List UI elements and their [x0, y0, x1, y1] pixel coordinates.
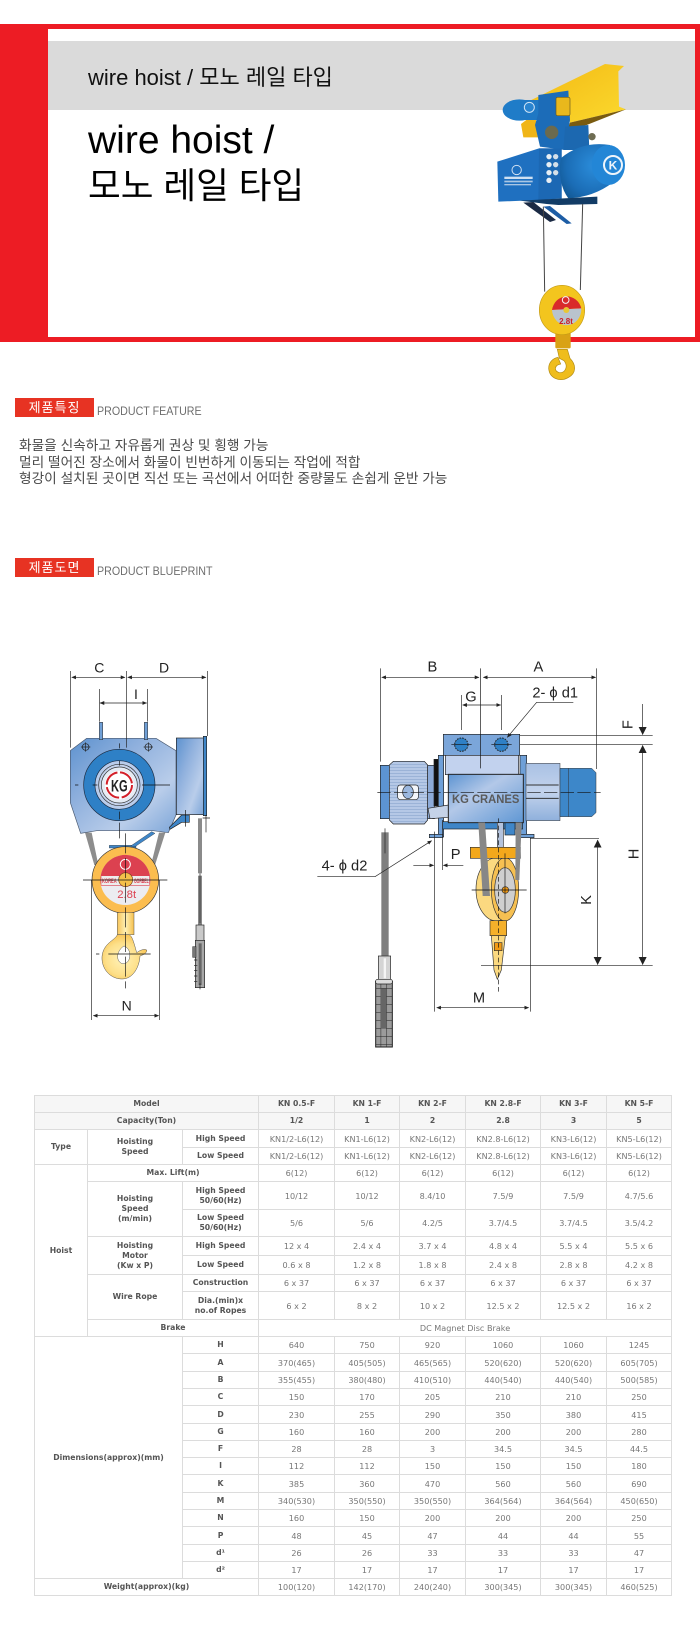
specification table: 520(620) — [555, 1358, 592, 1368]
specification table: 1/2 — [290, 1116, 303, 1125]
specification table: (m/min) — [118, 1214, 152, 1223]
centre lines — [377, 668, 601, 993]
specification table: 150 — [425, 1461, 440, 1471]
specification table: 465(565) — [414, 1358, 451, 1368]
specification table: Brake — [161, 1323, 185, 1332]
specification table: High Speed — [196, 1134, 245, 1142]
specification table: 47 — [427, 1530, 438, 1540]
specification table: 5.5 x 6 — [625, 1241, 653, 1251]
specification table: 350(550) — [414, 1496, 451, 1506]
specification table: 370(465) — [278, 1358, 315, 1368]
specification table: 4.2/5 — [422, 1218, 443, 1228]
specification table: D — [217, 1410, 224, 1418]
I-beam — [521, 64, 626, 137]
specification table: 6 x 37 — [626, 1278, 652, 1288]
specification table: KN3-L6(12) — [551, 1151, 596, 1161]
specification table: 690 — [631, 1478, 647, 1488]
specification table: 180 — [631, 1461, 647, 1471]
specification table: 460(525) — [620, 1582, 658, 1592]
specification table: 470 — [425, 1478, 440, 1488]
specification table: KN 1-F — [353, 1099, 381, 1108]
specification table: G — [217, 1427, 224, 1436]
specification table: 230 — [289, 1410, 304, 1420]
main title: wire hoist / — [88, 119, 274, 162]
specification table: 48 — [291, 1530, 302, 1540]
specification table: KN3-L6(12) — [551, 1134, 596, 1144]
specification table: 205 — [425, 1392, 440, 1402]
small heading: wire hoist / 모노 레일 타입 — [88, 65, 333, 90]
specification table: 170 — [359, 1392, 375, 1402]
dimension labels: N — [122, 997, 132, 1013]
dimension labels: D — [159, 659, 169, 675]
specification table: 1.8 x 8 — [419, 1260, 446, 1270]
specification table: 50/60(Hz) — [199, 1223, 242, 1232]
dimension labels: B — [427, 660, 437, 676]
hook — [549, 349, 575, 380]
specification table: 3.7 x 4 — [419, 1241, 446, 1251]
specification table: 200 — [566, 1427, 581, 1437]
specification table: 290 — [425, 1410, 440, 1420]
dimension labels: F — [620, 720, 636, 729]
specification table: 150 — [566, 1461, 581, 1471]
specification table: 33 — [498, 1548, 508, 1558]
dimensions C D I N — [70, 671, 207, 1020]
specification table: P — [218, 1530, 223, 1540]
dimension labels: C — [94, 659, 104, 675]
top girder clamp — [443, 734, 520, 775]
specification table: 34.5 — [494, 1444, 512, 1454]
KG Cranes main case: KG CRANES — [452, 793, 520, 806]
specification table: KN 2-F — [418, 1099, 447, 1108]
specification table: 112 — [359, 1461, 375, 1471]
load block: 2.8t — [117, 889, 137, 901]
specification table: 5.5 x 4 — [560, 1241, 588, 1251]
centre lines — [75, 743, 210, 989]
specification table: Max. Lift(m) — [147, 1168, 200, 1177]
specification table: 2 — [430, 1116, 435, 1125]
specification table: 350 — [495, 1410, 511, 1420]
banner: grey title strip — [48, 41, 695, 110]
specification table: 3 — [430, 1444, 435, 1454]
specification table: KN 2.8-F — [484, 1099, 522, 1108]
specification table: F — [218, 1444, 223, 1453]
specification table: N — [217, 1513, 224, 1522]
specification table: 440(540) — [484, 1375, 522, 1385]
specification table: KN1-L6(12) — [344, 1151, 390, 1161]
dimension labels: A — [533, 660, 543, 676]
banner: white panel — [48, 29, 695, 337]
dimension labels: K — [579, 895, 595, 905]
specification table: 350(550) — [348, 1496, 386, 1506]
specification table — [34, 1095, 672, 1596]
blueprint: front view — [70, 659, 210, 1020]
specification table: Capacity(Ton) — [117, 1116, 176, 1125]
specification table: 12.5 x 2 — [486, 1300, 520, 1310]
section subtitle: product feature: PRODUCT FEATURE — [97, 404, 202, 418]
specification table: Wire Rope — [113, 1292, 157, 1301]
specification table: M — [217, 1496, 224, 1505]
specification table: 6 x 37 — [490, 1278, 516, 1288]
specification table: KN 3-F — [559, 1099, 588, 1108]
specification table: Low Speed — [197, 1213, 244, 1222]
feature text: 화물을 신속하고 자유롭게 권상 및 횡행 가능 — [19, 438, 268, 453]
specification table: 160 — [289, 1513, 304, 1523]
specification table: 240(240) — [414, 1582, 451, 1592]
control box — [497, 148, 562, 202]
wire ropes — [478, 823, 522, 896]
specification table: 385 — [289, 1478, 304, 1488]
specification table: KN5-L6(12) — [616, 1134, 662, 1144]
specification table: 10/12 — [355, 1190, 379, 1200]
specification table: 10 x 2 — [420, 1300, 445, 1310]
specification table: Hoisting — [117, 1240, 153, 1250]
housing — [70, 738, 176, 833]
specification table: 6 x 2 — [286, 1300, 307, 1310]
specification table: 17 — [291, 1565, 302, 1575]
feature text — [19, 438, 447, 486]
specification table: 415 — [631, 1410, 647, 1420]
specification table: 2.4 x 8 — [489, 1260, 517, 1270]
bolt holes — [81, 742, 153, 752]
specification table: 50/60(Hz) — [199, 1196, 242, 1204]
specification table: KN2.8-L6(12) — [476, 1151, 530, 1161]
specification table: I — [219, 1461, 222, 1470]
specification table: 33 — [427, 1548, 438, 1558]
specification table: 560 — [495, 1478, 511, 1488]
specification table: 34.5 — [564, 1444, 583, 1454]
specification table: 440(540) — [555, 1375, 592, 1385]
specification table: Dia.(min)x — [198, 1296, 243, 1304]
specification table: 605(705) — [620, 1358, 658, 1368]
specification table: 250 — [631, 1513, 647, 1523]
specification table: 33 — [568, 1548, 579, 1558]
drum with KG logo — [84, 749, 155, 821]
specification table: 1060 — [563, 1340, 584, 1350]
specification table: KN1-L6(12) — [344, 1134, 390, 1144]
section tag: product blueprint: 제품도면 — [29, 560, 80, 575]
specification table: 7.5/9 — [493, 1190, 513, 1200]
specification table: 28 — [362, 1444, 372, 1454]
specification table: 200 — [566, 1513, 581, 1523]
specification table: 45 — [362, 1530, 372, 1540]
specification table: A — [218, 1358, 223, 1366]
specification table: 12.5 x 2 — [557, 1300, 590, 1310]
specification table: 6(12) — [563, 1168, 584, 1178]
specification table: 500(585) — [620, 1375, 658, 1385]
specification table: Hoisting — [117, 1194, 153, 1203]
specification table: 160 — [359, 1427, 375, 1437]
specification table: 6 x 37 — [420, 1278, 445, 1288]
specification table: KN2.8-L6(12) — [476, 1134, 530, 1144]
bottom block — [470, 823, 520, 979]
hoist drum motor: K — [609, 158, 618, 172]
banner: red frame — [0, 24, 700, 342]
specification table: 142(170) — [348, 1582, 386, 1592]
specification table: 200 — [495, 1513, 511, 1523]
specification table: Low Speed — [197, 1151, 244, 1160]
specification table: 5/6 — [360, 1218, 374, 1228]
specification table: 3 — [571, 1116, 576, 1125]
specification table: Speed — [122, 1204, 148, 1213]
specification table: 200 — [425, 1513, 440, 1523]
specification table: H — [217, 1340, 224, 1349]
suspension ropes — [85, 833, 165, 865]
specification table: 255 — [359, 1410, 375, 1420]
specification table: DC Magnet Disc Brake — [420, 1323, 510, 1333]
right motor — [526, 763, 596, 821]
specification table: Dimensions(approx)(mm) — [53, 1452, 164, 1462]
specification table: KN 5-F — [625, 1099, 653, 1108]
photo: blue wire hoist — [497, 64, 626, 380]
specification table: KN1/2-L6(12) — [270, 1134, 323, 1144]
specification table: 6 x 37 — [354, 1278, 380, 1288]
specification table: 560 — [566, 1478, 581, 1488]
hook — [102, 913, 147, 979]
left drive motor — [380, 759, 439, 824]
specification table: 380 — [566, 1410, 581, 1420]
dimension labels: 4- ϕ d2 — [322, 859, 367, 875]
specification table: 26 — [362, 1548, 372, 1558]
specification table: 100(120) — [278, 1582, 315, 1592]
hook block: 2.8t — [559, 317, 573, 326]
wire guide bracket — [109, 832, 155, 848]
specification table: 280 — [631, 1427, 647, 1437]
specification table: 364(564) — [484, 1496, 522, 1506]
KG Cranes main case — [448, 774, 523, 823]
specification table: B — [218, 1375, 223, 1384]
hoist drum motor — [520, 144, 625, 224]
specification table: 5/6 — [290, 1218, 303, 1228]
section tag: product blueprint — [15, 558, 94, 577]
specification table: 1.2 x 8 — [353, 1260, 381, 1270]
specification table: 360 — [359, 1478, 375, 1488]
specification table: 17 — [568, 1565, 579, 1575]
specification table: Hoisting — [117, 1137, 153, 1146]
specification table: 16 x 2 — [626, 1300, 652, 1310]
specification table: 6(12) — [356, 1168, 378, 1178]
specification table: 380(480) — [348, 1375, 386, 1385]
side control box — [169, 736, 207, 829]
main title — [88, 119, 304, 206]
load block: KOREA — [102, 878, 117, 885]
specification table: 3.7/4.5 — [489, 1218, 517, 1228]
specification table: 6(12) — [422, 1168, 443, 1178]
specification table: 2.4 x 4 — [353, 1241, 381, 1251]
load block — [92, 847, 159, 913]
specification table: 210 — [566, 1392, 581, 1402]
dimension labels: G — [465, 690, 477, 706]
specification table: 28 — [291, 1444, 302, 1454]
specification table: 8 x 2 — [357, 1300, 377, 1310]
specification table: Motor — [122, 1250, 148, 1260]
specification table: 7.5/9 — [563, 1190, 584, 1200]
specification table: Construction — [193, 1278, 248, 1287]
specification table: 4.2 x 8 — [625, 1260, 653, 1270]
specification table: (Kw x P) — [117, 1260, 153, 1270]
specification table: 210 — [495, 1392, 511, 1402]
specification table: Model — [133, 1099, 160, 1108]
specification table: 2.8 — [496, 1116, 510, 1125]
mounting lugs — [99, 722, 148, 740]
specification table: 6(12) — [286, 1168, 307, 1178]
specification table: KN2-L6(12) — [410, 1134, 455, 1144]
specification table: 4.8 x 4 — [489, 1241, 517, 1251]
specification table: 750 — [359, 1340, 375, 1350]
specification table: 4.7/5.6 — [625, 1190, 653, 1200]
specification table: 0.6 x 8 — [283, 1260, 310, 1270]
specification table: KN2-L6(12) — [410, 1151, 455, 1161]
pendant cable — [376, 828, 392, 1047]
specification table: 3.7/4.5 — [559, 1218, 588, 1228]
specification table: 8.4/10 — [420, 1190, 445, 1200]
blueprint: side view — [317, 660, 653, 1048]
specification table: 55 — [634, 1530, 644, 1540]
specification table: no.of Ropes — [195, 1306, 246, 1314]
drum with KG logo: KG — [111, 776, 128, 795]
dimension labels — [94, 659, 169, 1013]
specification table: 1 — [364, 1116, 370, 1125]
specification table: 300(345) — [555, 1582, 592, 1592]
specification table: Low Speed — [197, 1260, 244, 1269]
specification table: Hoist — [50, 1246, 72, 1254]
specification table: 450(650) — [620, 1496, 658, 1506]
specification table: 300(345) — [484, 1582, 522, 1592]
specification table: 12 x 4 — [284, 1241, 309, 1251]
dimension labels: H — [626, 849, 642, 859]
specification table: Speed — [122, 1147, 148, 1156]
main title: 모노 레일 타입 — [88, 166, 304, 206]
specification table: Type — [51, 1142, 71, 1151]
specification table: 44 — [498, 1530, 508, 1540]
wire ropes — [543, 204, 583, 292]
specification table: K — [218, 1478, 223, 1488]
specification table: 6 x 37 — [561, 1278, 586, 1288]
specification table: 3.5/4.2 — [625, 1218, 653, 1228]
specification table: 47 — [634, 1548, 644, 1558]
specification table: 6(12) — [628, 1168, 650, 1178]
specification table: 920 — [425, 1340, 440, 1350]
specification table: High Speed — [196, 1241, 245, 1250]
specification table: 44.5 — [630, 1444, 648, 1454]
section tag: product feature: 제품특징 — [29, 400, 80, 415]
specification table: 200 — [425, 1427, 440, 1437]
lower frame — [428, 755, 534, 838]
specification table: 17 — [427, 1565, 438, 1575]
specification table: 355(455) — [278, 1375, 315, 1385]
specification table: 150 — [289, 1392, 304, 1402]
specification table: 2.8 x 8 — [560, 1260, 588, 1270]
specification table: 17 — [362, 1565, 372, 1575]
specification table: 410(510) — [414, 1375, 451, 1385]
load block: GORBEL — [134, 878, 149, 885]
specification table: C — [218, 1392, 223, 1401]
specification table: 1060 — [493, 1340, 513, 1350]
specification table: 340(530) — [278, 1496, 315, 1506]
specification table: 26 — [291, 1548, 302, 1558]
specification table: 150 — [359, 1513, 375, 1523]
specification table: 10/12 — [285, 1190, 308, 1200]
feature text: 형강이 설치된 곳이면 직선 또는 곡선에서 어떠한 중량물도 손쉽게 운반 가능 — [19, 471, 447, 486]
specification table: 640 — [289, 1340, 304, 1350]
specification table: 405(505) — [348, 1358, 386, 1368]
dimension labels: I — [134, 686, 138, 702]
trolley and motor — [503, 91, 596, 150]
specification table: 200 — [495, 1427, 511, 1437]
specification table: 17 — [498, 1565, 508, 1575]
specification table: d² — [216, 1565, 225, 1574]
hook block — [539, 285, 585, 348]
specification table: 44 — [568, 1530, 579, 1540]
specification table: d¹ — [216, 1548, 225, 1557]
specification table: 1245 — [629, 1340, 649, 1350]
pendant cable and control — [193, 818, 205, 988]
specification table: 250 — [631, 1392, 647, 1402]
dimension lines — [317, 668, 653, 1012]
feature text: 멀리 떨어진 장소에서 화물이 빈번하게 이동되는 작업에 적합 — [19, 454, 360, 470]
specification table: 520(620) — [484, 1358, 522, 1368]
section tag: product feature — [15, 398, 94, 417]
specification table: 112 — [289, 1461, 304, 1471]
specification table: 150 — [495, 1461, 511, 1471]
specification table: KN5-L6(12) — [616, 1151, 662, 1161]
specification table: 364(564) — [555, 1496, 592, 1506]
specification table: High Speed — [196, 1186, 245, 1194]
specification table: KN 0.5-F — [278, 1099, 315, 1108]
specification table: Weight(approx)(kg) — [104, 1582, 189, 1591]
dimension labels — [322, 660, 642, 1006]
specification table: 160 — [289, 1427, 304, 1437]
dimension labels: 2- ϕ d1 — [532, 685, 578, 701]
specification table: 5 — [636, 1116, 642, 1125]
dimension labels: P — [451, 847, 461, 863]
section subtitle: product blueprint: PRODUCT BLUEPRINT — [97, 564, 213, 578]
specification table: 6(12) — [492, 1168, 514, 1178]
dimension labels: M — [473, 990, 485, 1006]
specification table: 17 — [634, 1565, 644, 1575]
specification table: KN1/2-L6(12) — [270, 1151, 323, 1161]
specification table: 6 x 37 — [284, 1278, 309, 1288]
